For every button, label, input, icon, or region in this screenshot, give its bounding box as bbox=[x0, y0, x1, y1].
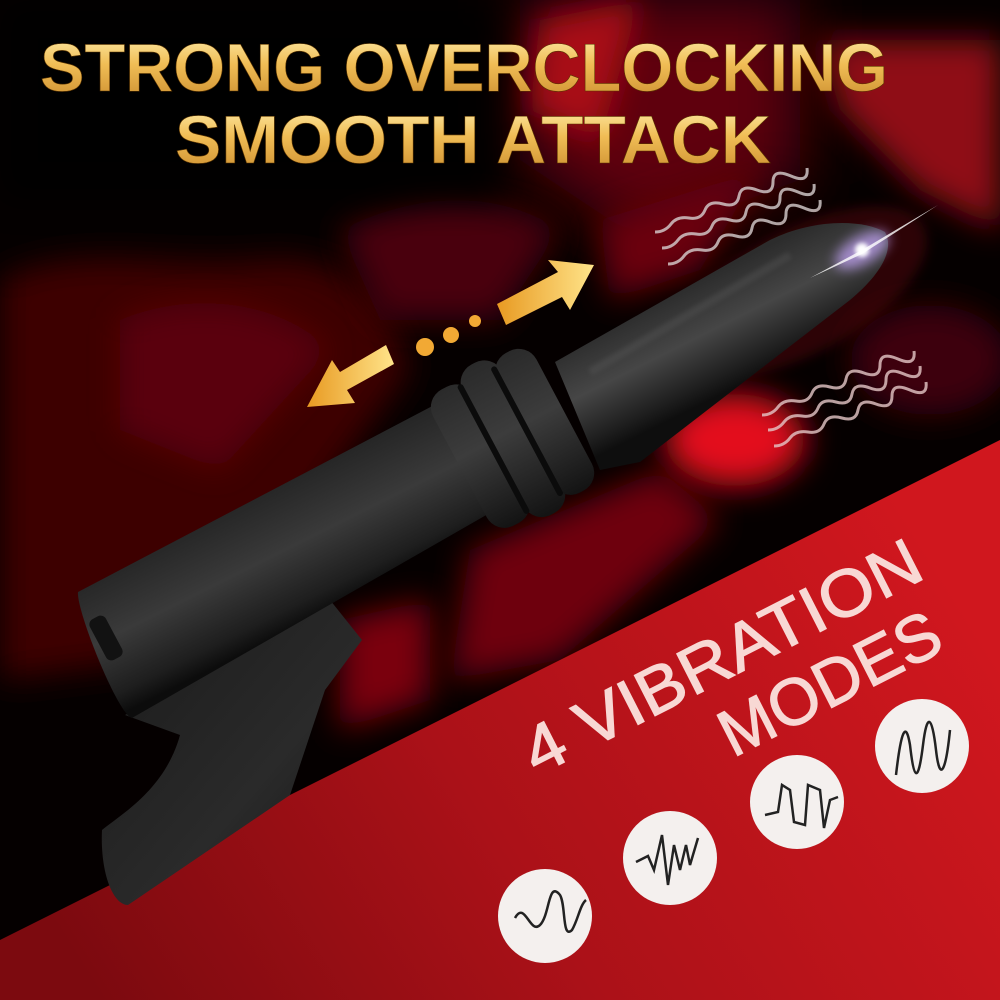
upper vibration waves bbox=[655, 168, 820, 264]
front section bbox=[555, 223, 888, 470]
arrow: left bbox=[307, 345, 394, 407]
title line 1: STRONG OVERCLOCKING bbox=[40, 30, 888, 106]
mode icon 2 bbox=[623, 811, 717, 905]
highlight on tip bbox=[590, 255, 790, 372]
light flare bbox=[810, 205, 938, 278]
product bbox=[78, 172, 953, 905]
end button bbox=[87, 613, 125, 663]
heading line 1: 4 VIBRATION bbox=[510, 524, 934, 788]
ribbed collar bbox=[420, 336, 604, 542]
mode icon 4 bbox=[875, 699, 969, 793]
arrow: right bbox=[497, 260, 594, 325]
title bbox=[40, 30, 888, 178]
grip bbox=[102, 600, 362, 905]
glow outline around tip bbox=[647, 172, 953, 412]
mode icon 3 bbox=[750, 755, 844, 849]
motion arrows bbox=[307, 260, 594, 407]
dots bbox=[416, 315, 481, 356]
lower vibration waves bbox=[762, 351, 926, 446]
red diagonal band bbox=[0, 440, 1000, 1000]
title line 2: SMOOTH ATTACK bbox=[175, 102, 771, 178]
heading line 2: MODES bbox=[706, 596, 953, 770]
vibration modes heading bbox=[510, 524, 953, 788]
barrel bbox=[78, 402, 495, 718]
mode icon 1 bbox=[498, 869, 592, 963]
